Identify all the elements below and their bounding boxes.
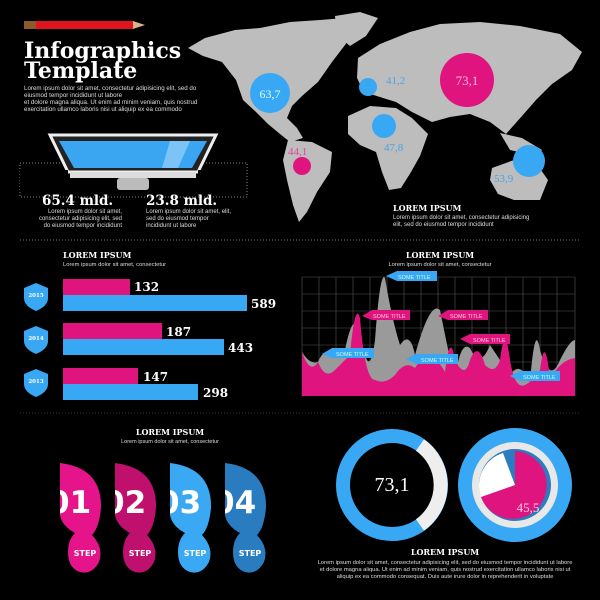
pie 45,5: 45,5 [517, 500, 539, 515]
bar chart: Lorem ipsum dolor sit amet, consectetur [63, 262, 166, 268]
intro text [24, 85, 198, 113]
steps heading: LOREM IPSUM [136, 427, 204, 437]
bar chart: LOREM IPSUM [63, 250, 131, 260]
bar chart: 147 [143, 370, 168, 384]
stat captions: consectetur adipisicing elit, sed [39, 216, 122, 222]
stat captions: Lorem ipsum dolor sit amet, [48, 209, 122, 215]
bottom caption: et dolore magna aliqua. Ut enim ad minim veniam, quis nostrud exercitation ullamco laboris nisi ut [320, 567, 571, 573]
bar chart: 443 [228, 341, 253, 355]
steps: STEP [239, 549, 261, 558]
steps: STEP [74, 549, 96, 558]
steps: 01 [48, 485, 91, 521]
stat captions: Lorem ipsum dolor sit amet, elit, [146, 209, 231, 215]
title: Template [24, 58, 137, 84]
steps: 04 [213, 485, 256, 521]
bottom caption: aliquip ex ea commodo consequat. Duis aute irure dolor in reprehenderit in voluptate [337, 574, 553, 580]
stat numbers [42, 193, 217, 209]
area chart: SOME TITLE [523, 375, 556, 381]
area chart: SOME TITLE [473, 338, 506, 344]
pencil [24, 21, 145, 29]
stat captions: sed do eiusmod tempor [146, 216, 209, 222]
map circles: 47,8 [384, 142, 404, 154]
steps [60, 463, 266, 573]
area chart: SOME TITLE [336, 352, 369, 358]
bar chart: 589 [251, 297, 276, 311]
world map [188, 12, 582, 222]
map circles: 44,1 [288, 146, 307, 158]
map circles: 73,1 [456, 73, 478, 88]
stat numbers: 65.4 mld. [42, 193, 113, 209]
map caption [393, 203, 529, 228]
title [24, 38, 181, 84]
intro text: Lorem ipsum dolor sit amet, consectetur adipisicing elit, sed do [24, 85, 197, 92]
map caption: elit, sed do eiusmod tempor incididunt [393, 222, 494, 228]
map circles: 63,7 [260, 87, 280, 101]
map caption: Lorem ipsum dolor sit amet, consectetur adipisicing [393, 215, 529, 221]
bar chart: 132 [134, 280, 159, 294]
area chart: SOME TITLE [421, 358, 454, 364]
map circles [250, 53, 545, 185]
map circles: 53,9 [494, 173, 514, 185]
bottom caption [318, 547, 572, 580]
dotted box [20, 163, 247, 197]
bar chart: 298 [203, 386, 228, 400]
intro text: eiusmod tempor incididunt ut labore [24, 92, 123, 99]
monitor [20, 135, 246, 190]
steps: STEP [184, 549, 206, 558]
bar chart [63, 250, 276, 400]
steps: 02 [103, 485, 146, 521]
intro text: et dolore magna aliqua. Ut enim ad minim veniam, quis nostrud [24, 99, 198, 106]
pie 45,5 [458, 428, 572, 542]
bar chart: 187 [166, 325, 191, 339]
map circles: 41,2 [386, 75, 405, 87]
donut 73,1: 73,1 [374, 474, 410, 496]
year shields: 2014 [28, 336, 44, 342]
stat captions [39, 209, 231, 229]
area chart: SOME TITLE [373, 314, 406, 320]
bottom caption: LOREM IPSUM [411, 547, 479, 557]
title: Infographics [24, 38, 181, 64]
steps heading [121, 427, 219, 445]
steps heading: Lorem ipsum dolor sit amet, consectetur [121, 439, 219, 445]
steps: STEP [129, 549, 151, 558]
year shields: 2015 [28, 293, 44, 299]
stat numbers: 23.8 mld. [146, 193, 217, 209]
area chart: Lorem ipsum dolor sit amet, consectetur [388, 262, 492, 268]
area chart [302, 250, 575, 396]
map caption: LOREM IPSUM [393, 203, 461, 213]
donut 73,1 [343, 436, 441, 534]
area chart: SOME TITLE [450, 314, 483, 320]
area chart: SOME TITLE [398, 275, 431, 281]
steps: 03 [158, 485, 201, 521]
year shields [24, 283, 48, 397]
intro text: exercitation ullamco laboris nisi ut aliquip ex ea commodo [24, 106, 182, 113]
stat captions: do eiusmod tempor incididunt [44, 223, 122, 229]
area chart: LOREM IPSUM [406, 250, 474, 260]
bottom caption: Lorem ipsum dolor sit amet, consectetur adipisicing elit, sed do eiusmod tempor incididunt ut labore [318, 560, 572, 566]
stat captions: incididunt ut labore [146, 223, 197, 229]
year shields: 2013 [28, 379, 44, 385]
